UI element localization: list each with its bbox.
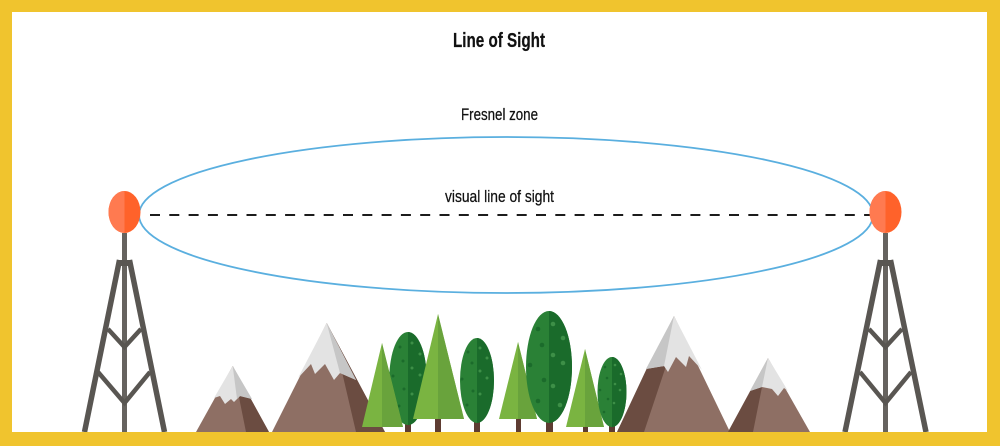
left tower structure	[84, 260, 164, 432]
left tower mast	[122, 233, 127, 432]
label: Fresnel zone: Fresnel zone	[461, 105, 538, 124]
tree oval 2	[460, 338, 494, 432]
mountain 4	[728, 358, 810, 432]
right antenna dish	[870, 191, 902, 233]
right tower mast	[883, 233, 888, 432]
mountain 3	[617, 316, 730, 432]
title: Line of Sight	[453, 30, 545, 52]
tree triangle 1	[362, 343, 403, 427]
right tower structure	[845, 260, 926, 432]
tree oval 3	[526, 311, 572, 432]
left antenna dish	[108, 191, 140, 233]
mountain 2	[272, 323, 385, 432]
visual line of sight dashed line	[150, 214, 870, 216]
tree triangle 4	[566, 349, 604, 432]
tree triangle 3	[499, 342, 537, 432]
tree triangle 2	[413, 314, 464, 432]
left tower with antenna	[84, 191, 164, 432]
tree oval 1	[389, 332, 427, 432]
Fresnel zone ellipse	[139, 137, 873, 293]
label: visual line of sight: visual line of sight	[445, 187, 554, 206]
mountain 1	[196, 366, 269, 432]
tree oval 4	[598, 357, 626, 432]
right tower with antenna	[845, 191, 926, 432]
